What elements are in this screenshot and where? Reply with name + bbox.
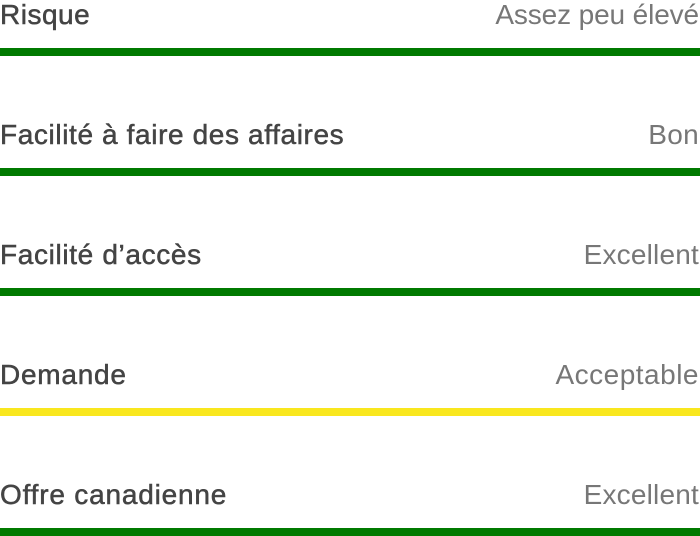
- row: Facilité à faire des affaires: [0, 119, 700, 176]
- green rating bar: [0, 528, 700, 536]
- value: Acceptable: Acceptable: [555, 359, 699, 390]
- row: Demande: [0, 359, 700, 416]
- row: Facilité d'accès: [0, 239, 700, 296]
- label: Demande: Demande: [0, 359, 127, 390]
- label: Facilité d'accès: Facilité d’accès: [0, 239, 202, 270]
- yellow rating bar: [0, 408, 700, 416]
- green rating bar: [0, 288, 700, 296]
- label: Facilité à faire des affaires: Facilité à faire des affaires: [0, 119, 344, 150]
- green rating bar: [0, 168, 700, 176]
- value: Excellent: Excellent: [584, 239, 699, 270]
- label: Offre canadienne: Offre canadienne: [0, 479, 227, 510]
- value: Bon: Bon: [648, 119, 699, 150]
- green rating bar: [0, 48, 700, 56]
- row: Risque: [0, 0, 700, 56]
- row: Offre canadienne: [0, 479, 700, 536]
- value: Excellent: Excellent: [584, 479, 699, 510]
